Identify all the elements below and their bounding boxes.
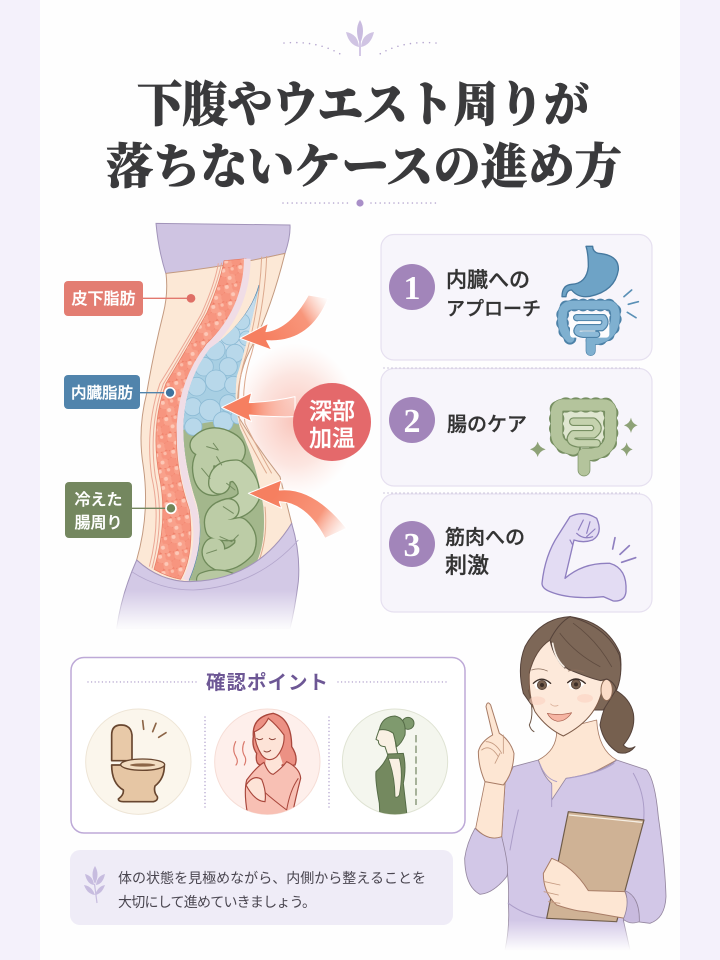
- card 1: 内臓へのアプローチ: 内臓への: [446, 269, 530, 292]
- ponytail: [600, 690, 635, 753]
- raised hand: [478, 703, 514, 785]
- connector: visceral: [140, 391, 170, 395]
- blush: [529, 696, 545, 705]
- bottom fade: [500, 920, 640, 951]
- hair strands: [529, 623, 612, 673]
- icon: woman posture: [342, 709, 448, 818]
- card 3: 筋肉への刺激: 筋肉への: [445, 526, 525, 549]
- garment fade: [113, 590, 303, 630]
- heat arrow 1: [240, 295, 328, 350]
- summary note: 大切にして進めていきましょう。: [118, 894, 316, 910]
- card 1: 内臓へのアプローチ: [381, 234, 652, 360]
- sweater folds: [508, 763, 644, 918]
- dot: gut: [166, 503, 176, 513]
- icon: green intestine: [530, 405, 638, 470]
- label: 皮下脂肪: [64, 281, 143, 316]
- sleeve: [465, 828, 508, 894]
- fingers: [482, 735, 503, 763]
- eye right: [568, 679, 585, 690]
- eyebrows: [532, 669, 584, 672]
- neck and chest: [538, 720, 617, 802]
- card 2: 腸のケア: [381, 368, 652, 486]
- card 3: 筋肉への刺激: [381, 493, 652, 612]
- icon: toilet: [86, 709, 191, 814]
- sweater: [502, 760, 666, 950]
- right cuff: [623, 891, 639, 923]
- badge: 深部加温: 加温: [309, 425, 355, 451]
- membrane outline: [184, 285, 259, 581]
- nose: [551, 704, 558, 706]
- heat arrow 3: [248, 480, 347, 538]
- icon: lavender leaf: [84, 866, 105, 903]
- badge: 深部加温: 深部: [309, 398, 355, 424]
- icon: stomach and intestines: [562, 246, 638, 351]
- forearm: [476, 782, 505, 838]
- summary note: [70, 850, 453, 925]
- back hair: [520, 617, 621, 710]
- mouth: [547, 713, 572, 721]
- card 1: 内臓へのアプローチ: アプローチ: [446, 298, 541, 320]
- holding hand: [543, 858, 627, 918]
- membrane band: [180, 259, 247, 580]
- card 3: 筋肉への刺激: 3: [404, 527, 420, 564]
- ear: [601, 679, 612, 701]
- panel: 確認ポイント: [71, 658, 465, 833]
- right layer lines: [238, 256, 272, 567]
- face: [529, 640, 603, 736]
- lower garment: [117, 523, 299, 628]
- dot: subcutaneous: [187, 294, 195, 303]
- book: [547, 812, 644, 922]
- hair highlights: [553, 643, 564, 667]
- label: 冷えた腸周り: [65, 482, 132, 538]
- card 1: 内臓へのアプローチ: 1: [404, 270, 420, 307]
- heat arrow 2: [222, 393, 295, 422]
- icon: woman breathing: [215, 709, 320, 818]
- label: 内臓脂肪: 内臓脂肪: [71, 384, 133, 402]
- connector: subcutaneous: [143, 296, 191, 300]
- waistband line: [132, 540, 298, 590]
- title: 落ちないケースの進め方: [106, 141, 622, 194]
- label: 内臓脂肪: [64, 375, 140, 409]
- blush right: [577, 694, 593, 703]
- dot: visceral: [165, 388, 175, 398]
- title: [106, 79, 622, 194]
- icon: flexed arm: [542, 514, 636, 601]
- front hair: [550, 617, 621, 690]
- panel heading: 確認ポイント: [206, 672, 329, 694]
- skin layer lines: [149, 263, 222, 568]
- top ornament: lavender sprig with dotted arcs: [284, 20, 436, 57]
- connector: gut: [132, 506, 171, 510]
- title: 下腹やウエスト周りが: [137, 79, 589, 132]
- heat glow: [232, 343, 358, 497]
- badge: 深部加温: [293, 383, 371, 461]
- card 2: 腸のケア: 2: [404, 403, 420, 440]
- illustration: woman with book: [465, 617, 666, 951]
- inner cavity: visceral fat and gut: [184, 286, 264, 581]
- subcutaneous fat layer: [154, 259, 246, 579]
- label: 皮下脂肪: 皮下脂肪: [71, 290, 136, 308]
- card 3: 筋肉への刺激: 刺激: [445, 553, 489, 578]
- diagram: abdomen cross-section: [113, 223, 358, 630]
- label: 冷えた腸周り: 腸周り: [74, 514, 123, 532]
- eye left: [533, 679, 551, 690]
- side lock: [528, 690, 534, 732]
- top garment: [156, 223, 290, 274]
- title divider: [283, 199, 437, 207]
- summary note: 体の状態を見極めながら、内側から整えることを: [118, 870, 426, 886]
- card 2: 腸のケア: 腸のケア: [447, 414, 527, 436]
- label: 冷えた腸周り: 冷えた: [74, 491, 123, 509]
- skin layer: [137, 253, 292, 582]
